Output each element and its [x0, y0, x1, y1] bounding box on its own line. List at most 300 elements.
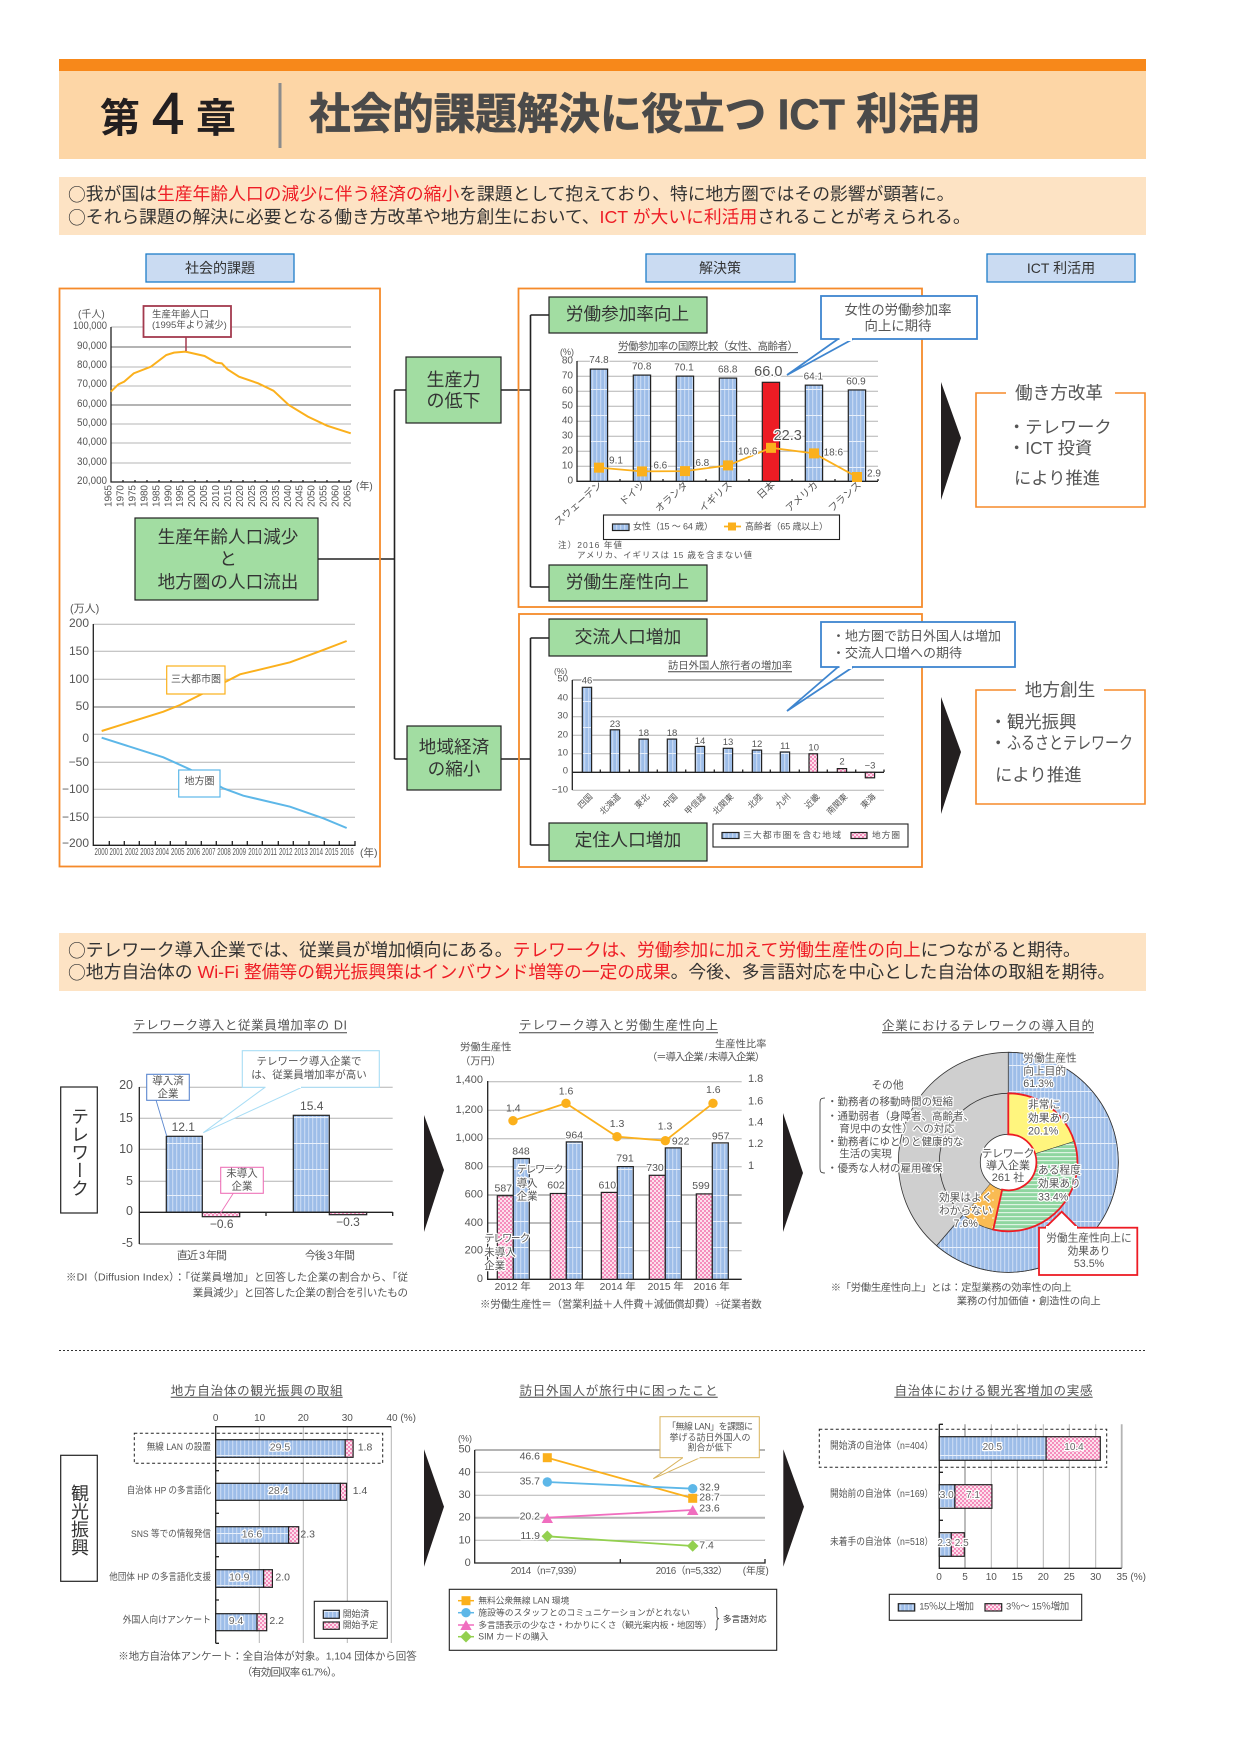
bar chart: foreign visitor growth by region: 14 [695, 736, 705, 747]
line chart: working-age population: 2045 [294, 485, 306, 507]
bar and line chart: telework and productivity: 600 [465, 1188, 483, 1200]
bar chart: labour participation international comparison: アメリカ、イギリスは 15 歳を含まない値 [577, 550, 752, 560]
legend: 3％～ 15％増加 [1006, 1600, 1069, 1612]
line chart: working-age population: 2015 [223, 485, 234, 507]
donut chart: purpose of telework: 業務の付加価値・創造性の向上 [957, 1294, 1101, 1308]
bar chart: foreign visitor growth by region: 30 [557, 710, 568, 722]
bar chart: labour participation international comparison [551, 340, 881, 560]
panel: regional revitalisation: 地方創生 [1025, 680, 1095, 700]
bar and line chart: telework and productivity: ※労働生産性＝（営業利益＋人件費＋減価償却費）÷従業者数 [480, 1297, 762, 1310]
legend: 三大都市圏を含む地域 [743, 829, 841, 840]
bar chart: telework and employee growth DI: −0.3 [336, 1215, 360, 1229]
line chart: difficulties of foreign visitors: 35.7 [520, 1476, 540, 1488]
bar chart: labour participation international comparison: ドイツ [618, 480, 648, 508]
bar chart: labour participation international comparison: 60.9 [846, 376, 866, 388]
box: shrinking regional economy [407, 726, 501, 790]
panel: regional revitalisation: ・ [990, 733, 1007, 753]
bar and line chart: telework and productivity: 生産性比率 [715, 1038, 766, 1050]
legend [449, 1589, 777, 1650]
bar and line chart: telework and productivity: 2013 年 [549, 1280, 585, 1293]
bar and line chart: telework and productivity: （＝導入企業 / 未導入企業） [647, 1050, 765, 1064]
bar and line chart: telework and productivity: 企業 [517, 1190, 538, 1203]
bar and line chart: telework and productivity: 1.6 [706, 1084, 721, 1096]
line chart: working-age population: 100,000 [73, 320, 107, 332]
line chart: working-age population: 2040 [283, 485, 294, 507]
bar chart: labour participation international comparison: 66.0 [754, 364, 782, 380]
donut chart: purpose of telework: ・勤務者にゆとりと健康的な [827, 1135, 964, 1148]
legend: 多言語表示の少なさ・わかりにくさ（観光案内板・地図等） [478, 1619, 712, 1630]
line chart: working-age population [73, 306, 373, 507]
bar chart: labour participation international comparison: アメリカ [783, 479, 821, 515]
callout: wireless LAN issue declining: 「無線 LAN」を課題に [667, 1421, 753, 1432]
callout: introduced firms: 企業 [158, 1087, 179, 1100]
chapter header band: 章 [196, 97, 236, 141]
callout: telework firms have higher growth: は、従業員増加率が高い [251, 1068, 367, 1081]
bar chart: municipal sense of visitor increase: 10.4 [1064, 1442, 1084, 1453]
line chart: working-age population: 40,000 [77, 436, 107, 448]
panel: regional solutions [519, 614, 922, 867]
bar chart: municipal sense of visitor increase: 5 [962, 1572, 968, 1583]
line chart: net migration: −200 [62, 836, 89, 850]
bar chart: foreign visitor growth by region: 46 [582, 676, 592, 686]
intro text block 2: ○地方自治体の Wi-Fi 整備等の観光振興策はインバウンド増等の一定の成果。今後、多言語対応を中心とした自治体の取組を期待。 [68, 959, 1115, 985]
callout: productivity improvement 53.5% [1039, 1212, 1137, 1275]
bar and line chart: telework and productivity: 1,400 [455, 1074, 483, 1086]
line chart: net migration: 2003 [140, 847, 154, 858]
line chart: working-age population: (1995年より減少) [152, 319, 227, 331]
bar chart: municipal tourism initiatives: ※地方自治体アンケート：全自治体が対象。1,104 団体から回答 [118, 1649, 417, 1662]
legend: 高齢者（65 歳以上） [745, 520, 828, 532]
bar chart: labour participation international comparison: フランス [826, 479, 864, 515]
callout: introduced firms: 導入済 [152, 1074, 184, 1087]
line chart: working-age population: (千人) [78, 308, 105, 320]
line chart: net migration: 50 [76, 699, 89, 713]
legend [314, 1601, 387, 1638]
donut chart: purpose of telework: 生活の実現 [839, 1147, 892, 1160]
line chart: net migration: 2014 [310, 847, 323, 858]
bar chart: municipal sense of visitor increase: 開始済の自治体（n=404） [830, 1439, 933, 1452]
line chart: working-age population: 1995 [175, 485, 186, 507]
column heading: social issues [146, 254, 294, 282]
bar chart: municipal tourism initiatives: 28.4 [268, 1485, 289, 1497]
column heading: social issues: 社会的課題 [185, 260, 255, 276]
bar chart: labour participation international comparison: 18.6 [824, 448, 843, 458]
callout: non-introduced firms: 企業 [232, 1180, 253, 1193]
column heading: solutions [646, 254, 795, 282]
bar and line chart: telework and productivity: 848 [512, 1146, 530, 1158]
callout: expectation for women's participation: 女性の労働参加率 [844, 302, 952, 318]
bar and line chart: telework and productivity: テレワーク導入と労働生産性向上 [519, 1018, 718, 1032]
panel: work-style reform: により推進 [1014, 468, 1100, 488]
legend [604, 515, 840, 540]
line chart: net migration: −150 [62, 810, 89, 824]
bar and line chart: telework and productivity [455, 1018, 766, 1310]
bar and line chart: telework and productivity: 0 [477, 1273, 483, 1285]
bar and line chart: telework and productivity: 1,000 [455, 1132, 483, 1144]
box: lower productivity: 生産力 [426, 370, 480, 390]
callout: wireless LAN issue declining [653, 1417, 759, 1479]
bar chart: foreign visitor growth by region: 18 [638, 728, 649, 739]
bar chart: foreign visitor growth by region: 10 [557, 748, 568, 758]
donut chart: purpose of telework: 労働生産性 [1023, 1051, 1077, 1064]
callout: wireless LAN issue declining: 挙げる訪日外国人の [669, 1431, 751, 1442]
bar and line chart: telework and productivity: 企業 [484, 1259, 506, 1272]
bar chart: foreign visitor growth by region: 甲信越 [682, 791, 708, 817]
line chart: net migration: 2012 [279, 847, 293, 858]
line chart: net migration: −100 [62, 782, 89, 796]
line chart: net migration: 200 [69, 616, 89, 630]
bar chart: labour participation international comparison: 2.9 [867, 468, 881, 480]
bar and line chart: telework and productivity: 400 [465, 1217, 483, 1229]
bar and line chart: telework and productivity: 730 [646, 1162, 664, 1174]
callout: telework firms have higher growth: テレワーク導入企業で [256, 1055, 362, 1068]
callout: productivity improvement 53.5%: 53.5% [1074, 1258, 1105, 1270]
box: working-age population decline and regional outflow: と [219, 549, 237, 569]
bar and line chart: telework and productivity: 800 [465, 1161, 483, 1173]
line chart: net migration: 150 [69, 644, 89, 658]
line chart: net migration: 三大都市圏 [171, 672, 221, 686]
legend: 15％以上増加 [919, 1600, 974, 1612]
line chart: working-age population: 1975 [128, 485, 138, 507]
bar chart: foreign visitor growth by region: 北関東 [710, 791, 736, 817]
panel: labour solutions [518, 288, 922, 607]
bar chart: labour participation international comparison: 労働参加率の国際比較（女性、高齢者） [618, 340, 798, 352]
bar chart: telework and employee growth DI: 15.4 [300, 1099, 324, 1113]
bar chart: municipal sense of visitor increase [819, 1383, 1146, 1620]
line chart: difficulties of foreign visitors: 0 [465, 1557, 471, 1569]
arrow: telework 1 [424, 1115, 444, 1232]
bar chart: telework and employee growth DI: 12.1 [172, 1120, 195, 1134]
panel: work-style reform: 働き方改革 [1015, 383, 1103, 403]
donut chart: purpose of telework: 261 社 [992, 1170, 1024, 1184]
bar chart: telework and employee growth DI: ※DI（Diffusion Index）：「従業員増加」と回答した企業の割合から、「従 [66, 1271, 408, 1284]
bar chart: telework and employee growth DI: 15 [119, 1111, 133, 1125]
line chart: difficulties of foreign visitors: 30 [458, 1489, 471, 1501]
box: raise labour productivity: 労働生産性向上 [566, 572, 689, 592]
connector lines [318, 315, 549, 845]
bar chart: municipal tourism initiatives: 2.0 [275, 1572, 290, 1584]
arrow: to regional revitalisation [941, 697, 961, 814]
legend [889, 1594, 1082, 1620]
line chart: working-age population: 2010 [211, 485, 222, 507]
bar and line chart: telework and productivity: 1.6 [748, 1096, 763, 1108]
side label: telework [61, 1087, 97, 1213]
line chart: working-age population: (年) [356, 480, 373, 492]
line chart: net migration: 2007 [202, 847, 216, 858]
bar and line chart: telework and productivity: 1.2 [748, 1138, 763, 1150]
line chart: net migration: 地方圏 [184, 774, 214, 788]
bar and line chart: telework and productivity: 2014 年 [600, 1280, 636, 1293]
bar and line chart: telework and productivity: 労働生産性 [460, 1040, 511, 1054]
line chart: difficulties of foreign visitors: 10 [458, 1534, 471, 1546]
donut chart: purpose of telework: 非常に [1028, 1098, 1060, 1111]
line chart: net migration: 2005 [171, 847, 185, 858]
box: lower productivity: の低下 [426, 391, 480, 411]
bar and line chart: telework and productivity: 未導入 [484, 1246, 516, 1259]
bar chart: municipal sense of visitor increase: 開始前の自治体（n=169） [830, 1487, 933, 1500]
line chart: net migration [62, 603, 378, 859]
bar chart: labour participation international comparison: 74.8 [589, 355, 609, 366]
bar and line chart: telework and productivity: 2016 年 [694, 1280, 730, 1293]
bar and line chart: telework and productivity: 1 [748, 1160, 754, 1172]
bar chart: municipal sense of visitor increase: 35 (%) [1116, 1572, 1146, 1583]
bar chart: municipal sense of visitor increase: 30 [1090, 1572, 1102, 1583]
line chart: net migration: 0 [82, 731, 89, 745]
bar chart: municipal tourism initiatives: SNS 等での情報発信 [131, 1528, 211, 1540]
donut chart: purpose of telework: ・通勤弱者（身障者、高齢者、 [827, 1110, 974, 1123]
bar chart: foreign visitor growth by region: 0 [563, 766, 568, 776]
bar chart: telework and employee growth DI: 業員減少」と回答した企業の割合を引いたもの [193, 1286, 408, 1299]
bar and line chart: telework and productivity: 1.3 [610, 1118, 624, 1130]
callout: regional visitor expectation [787, 622, 1015, 711]
donut chart: purpose of telework: わからない [939, 1205, 992, 1217]
line chart: net migration: −50 [69, 755, 89, 769]
bar chart: labour participation international comparison: 注）2016 年値 [558, 540, 622, 550]
bar and line chart: telework and productivity: 610 [599, 1179, 616, 1191]
line chart: difficulties of foreign visitors: 訪日外国人が旅行中に困ったこと [520, 1383, 718, 1398]
column heading: ICT use: ICT 利活用 [1027, 260, 1095, 276]
box: increase settled population [549, 823, 707, 861]
bar chart: labour participation international comparison: 22.3 [774, 428, 802, 444]
line chart: net migration: 2000 [95, 847, 108, 858]
box: raise labour productivity [549, 565, 707, 601]
bar and line chart: telework and productivity: 2012 年 [495, 1280, 531, 1293]
bar chart: municipal tourism initiatives: 他団体 HP の多言語化支援 [109, 1571, 211, 1583]
bar chart: foreign visitor growth by region: 北海道 [597, 791, 623, 817]
legend: 地方圏 [872, 829, 900, 840]
line chart: working-age population: 1980 [140, 485, 150, 507]
box: lower productivity [406, 357, 501, 423]
callout: non-introduced firms [220, 1166, 263, 1214]
bar chart: municipal sense of visitor increase: 20.5 [983, 1442, 1002, 1453]
bar chart: foreign visitor growth by region: 南関東 [824, 791, 850, 817]
legend: 女性（15 ～ 64 歳） [633, 520, 713, 532]
bar chart: municipal sense of visitor increase: 3.0 [940, 1490, 954, 1501]
bar chart: telework and employee growth DI: 今後 3 年間 [305, 1248, 355, 1262]
bar chart: municipal sense of visitor increase: 2.3 [937, 1538, 952, 1549]
line chart: net migration: 2010 [248, 847, 262, 858]
bar chart: municipal tourism initiatives: 2.3 [300, 1529, 315, 1541]
panel: regional revitalisation: ふるさとテレワーク [1007, 733, 1133, 753]
donut chart: purpose of telework: 効果はよく [939, 1192, 992, 1204]
line chart: working-age population: 2060 [330, 485, 342, 507]
line chart: working-age population: 2030 [259, 485, 270, 507]
bar chart: municipal tourism initiatives: 0 [213, 1413, 219, 1424]
bar chart: labour participation international comparison: 40 [562, 416, 573, 426]
panel: work-style reform: ・ICT 投資 [1008, 438, 1092, 458]
callout: expectation for women's participation [787, 296, 977, 375]
bar chart: telework and employee growth DI: 10 [119, 1142, 133, 1156]
callout: productivity improvement 53.5%: 効果あり [1068, 1245, 1110, 1257]
bar chart: labour participation international comparison: 70.1 [674, 362, 694, 374]
legend: SIM カードの購入 [478, 1631, 548, 1642]
bar chart: foreign visitor growth by region: 四国 [575, 791, 595, 811]
line chart: working-age population: 2055 [318, 485, 330, 507]
donut chart: purpose of telework: ある程度 [1038, 1164, 1081, 1177]
bar chart: foreign visitor growth by region: 北陸 [745, 791, 765, 811]
bar chart: foreign visitor growth by region: 23 [610, 719, 620, 730]
bar chart: municipal tourism initiatives: 20 [298, 1413, 309, 1424]
panel: regional revitalisation: ・観光振興 [990, 712, 1076, 732]
box: working-age population decline and regional outflow: 地方圏の人口流出 [158, 572, 298, 592]
bar chart: municipal tourism initiatives: 16.6 [242, 1529, 262, 1541]
bar chart: municipal tourism initiatives: 30 [342, 1413, 353, 1424]
bar chart: municipal tourism initiatives: 29.5 [270, 1442, 290, 1454]
bar and line chart: telework and productivity: 200 [465, 1245, 483, 1257]
bar chart: foreign visitor growth by region [552, 659, 908, 847]
donut chart: purpose of telework: 61.3% [1023, 1078, 1054, 1090]
bar chart: municipal tourism initiatives: 1.8 [358, 1442, 372, 1454]
bar and line chart: telework and productivity: 導入 [517, 1176, 538, 1189]
bar chart: foreign visitor growth by region: (%) [554, 666, 567, 676]
bar and line chart: telework and productivity: 957 [712, 1131, 730, 1143]
bar chart: foreign visitor growth by region: 11 [780, 741, 790, 752]
bar and line chart: telework and productivity: テレワーク [484, 1232, 530, 1244]
bar chart: municipal tourism initiatives: 1.4 [353, 1485, 367, 1497]
callout: productivity improvement 53.5%: 労働生産性向上に [1046, 1232, 1132, 1245]
arrow: tourism 1 [424, 1449, 444, 1567]
legend: 開始予定 [343, 1619, 378, 1630]
bar and line chart: telework and productivity: 791 [616, 1152, 634, 1164]
line chart: working-age population: 2035 [271, 485, 282, 507]
donut chart: purpose of telework [820, 1018, 1137, 1308]
bar chart: municipal sense of visitor increase: 15 [1012, 1572, 1023, 1583]
line chart: net migration: 2002 [125, 847, 139, 858]
bar chart: municipal tourism initiatives: 自治体 HP の多言語化 [127, 1484, 211, 1496]
bar chart: foreign visitor growth by region: 18 [667, 728, 677, 739]
line chart: difficulties of foreign visitors: 2016（n=5,332） [656, 1565, 728, 1577]
box: increase exchange population: 交流人口増加 [575, 627, 681, 647]
bar chart: municipal sense of visitor increase: 25 [1064, 1572, 1075, 1583]
panel: regional revitalisation: により推進 [995, 765, 1082, 785]
intro text block 1 [59, 177, 1146, 235]
callout: expectation for women's participation: 向上に期待 [865, 318, 931, 334]
bar chart: foreign visitor growth by region: 10 [808, 742, 819, 754]
arrow: telework 2 [783, 1113, 803, 1232]
bar and line chart: telework and productivity: 587 [495, 1182, 512, 1194]
line chart: working-age population: 2050 [306, 485, 318, 507]
callout: introduced firms [147, 1074, 189, 1136]
donut chart: purpose of telework: 20.1% [1028, 1126, 1059, 1138]
line chart: working-age population: 1985 [152, 485, 162, 507]
line chart: working-age population: 90,000 [77, 340, 107, 352]
bar chart: labour participation international comparison: 70 [562, 370, 573, 382]
bar and line chart: telework and productivity: 602 [547, 1180, 565, 1192]
donut chart: purpose of telework: 効果あり [1028, 1112, 1071, 1124]
bar chart: foreign visitor growth by region: 近畿 [802, 791, 822, 811]
bar chart: municipal sense of visitor increase: 10 [986, 1572, 997, 1583]
line chart: working-age population: 2005 [199, 485, 210, 507]
bar chart: labour participation international comparison: スウェーデン [551, 478, 605, 528]
line chart: difficulties of foreign visitors: 32.9 [699, 1482, 720, 1494]
bar and line chart: telework and productivity: （万円） [460, 1056, 501, 1068]
callout: telework firms have higher growth [203, 1051, 379, 1133]
bar chart: foreign visitor growth by region: 13 [723, 737, 733, 748]
bar chart: municipal tourism initiatives: 10 [254, 1413, 266, 1424]
box: working-age population decline and regional outflow [135, 518, 318, 600]
chapter header band [59, 59, 1146, 159]
bar and line chart: telework and productivity: 599 [692, 1180, 710, 1192]
bar chart: foreign visitor growth by region: 50 [557, 674, 568, 684]
line chart: working-age population: 生産年齢人口 [152, 308, 209, 320]
line chart: working-age population: 2025 [247, 485, 258, 507]
bar and line chart: telework and productivity: 1.6 [559, 1086, 573, 1098]
line chart: working-age population: 2020 [235, 485, 246, 507]
bar chart: foreign visitor growth by region: 12 [752, 739, 762, 750]
legend: 施設等のスタッフとのコミュニケーションがとれない [478, 1607, 690, 1618]
legend [713, 824, 908, 847]
line chart: net migration: 2016 [340, 847, 354, 858]
chapter header band: 第 [100, 97, 140, 141]
line chart: net migration: 2009 [233, 847, 246, 858]
box: raise labour participation: 労働参加率向上 [566, 304, 689, 324]
bar chart: telework and employee growth DI: −0.6 [210, 1217, 234, 1231]
bar chart: municipal sense of visitor increase: 未着手の自治体（n=518） [830, 1535, 933, 1548]
bar chart: telework and employee growth DI: 0 [126, 1204, 133, 1218]
line chart: net migration: 2011 [264, 847, 277, 858]
panel: work-style reform: ・テレワーク [1008, 417, 1112, 437]
bar chart: municipal tourism initiatives: 40 (%) [386, 1413, 416, 1424]
line chart: net migration: 2001 [110, 847, 123, 858]
divider [59, 1350, 1146, 1352]
line chart: net migration: (万人) [70, 603, 99, 615]
line chart: difficulties of foreign visitors: 50 [458, 1444, 471, 1456]
bar chart: labour participation international comparison: 10.6 [738, 446, 758, 458]
line chart: difficulties of foreign visitors [449, 1383, 777, 1650]
intro text block 1: ○我が国は生産年齢人口の減少に伴う経済の縮小を課題として抱えており、特に地方圏ではその影響が顕著に。 [68, 181, 954, 207]
callout: non-introduced firms: 未導入 [226, 1166, 258, 1180]
bar and line chart: telework and productivity: 2015 年 [648, 1280, 684, 1293]
line chart: working-age population: 60,000 [77, 398, 107, 410]
bar chart: labour participation international comparison: 日本 [754, 478, 778, 501]
bar chart: foreign visitor growth by region: −3 [865, 760, 875, 772]
legend: 無料公衆無線 LAN 環境 [478, 1595, 569, 1606]
line chart: difficulties of foreign visitors: (年度) [743, 1564, 769, 1577]
bar chart: municipal tourism initiatives: 10.9 [229, 1572, 250, 1584]
line chart: difficulties of foreign visitors: 2014（n=7,939） [511, 1565, 583, 1577]
line chart: difficulties of foreign visitors: 46.6 [520, 1451, 540, 1463]
line chart: net migration: 2015 [325, 847, 339, 858]
bar chart: labour participation international comparison: 64.1 [804, 372, 823, 382]
bar chart: municipal tourism initiatives: 9.4 [229, 1615, 243, 1627]
callout: wireless LAN issue declining: 割合が低下 [687, 1442, 733, 1453]
line chart: difficulties of foreign visitors: 28.7 [699, 1492, 720, 1504]
bar chart: labour participation international comparison: 20 [562, 446, 573, 456]
bar chart: labour participation international comparison: 30 [562, 430, 573, 442]
bar chart: foreign visitor growth by region: 九州 [773, 791, 793, 811]
arrow: tourism 2 [783, 1449, 804, 1567]
bar chart: foreign visitor growth by region: 訪日外国人旅行者の増加率 [668, 659, 792, 672]
panel: social issues [60, 288, 380, 866]
bar chart: foreign visitor growth by region: 中国 [660, 791, 680, 811]
bar and line chart: telework and productivity: 964 [566, 1130, 583, 1142]
donut chart: purpose of telework: 導入企業 [986, 1158, 1030, 1172]
bar chart: municipal tourism initiatives: 2.2 [269, 1615, 284, 1627]
bar and line chart: telework and productivity: 1.3 [658, 1121, 672, 1133]
arrow: to work-style reform [941, 382, 961, 500]
donut chart: purpose of telework: ・勤務者の移動時間の短縮 [827, 1095, 953, 1108]
legend: 多言語対応 [723, 1613, 767, 1624]
bar chart: municipal tourism initiatives: 無線 LAN の設置 [147, 1441, 211, 1453]
side label: tourism [61, 1455, 97, 1581]
column heading: solutions: 解決策 [699, 260, 741, 276]
bar chart: labour participation international comparison: 0 [567, 476, 573, 486]
box: raise labour participation [549, 297, 707, 333]
donut chart: purpose of telework: その他 [871, 1078, 904, 1091]
column heading: ICT use [987, 254, 1135, 282]
bar chart: foreign visitor growth by region: 40 [557, 692, 568, 704]
line chart: difficulties of foreign visitors: 11.9 [520, 1530, 540, 1542]
